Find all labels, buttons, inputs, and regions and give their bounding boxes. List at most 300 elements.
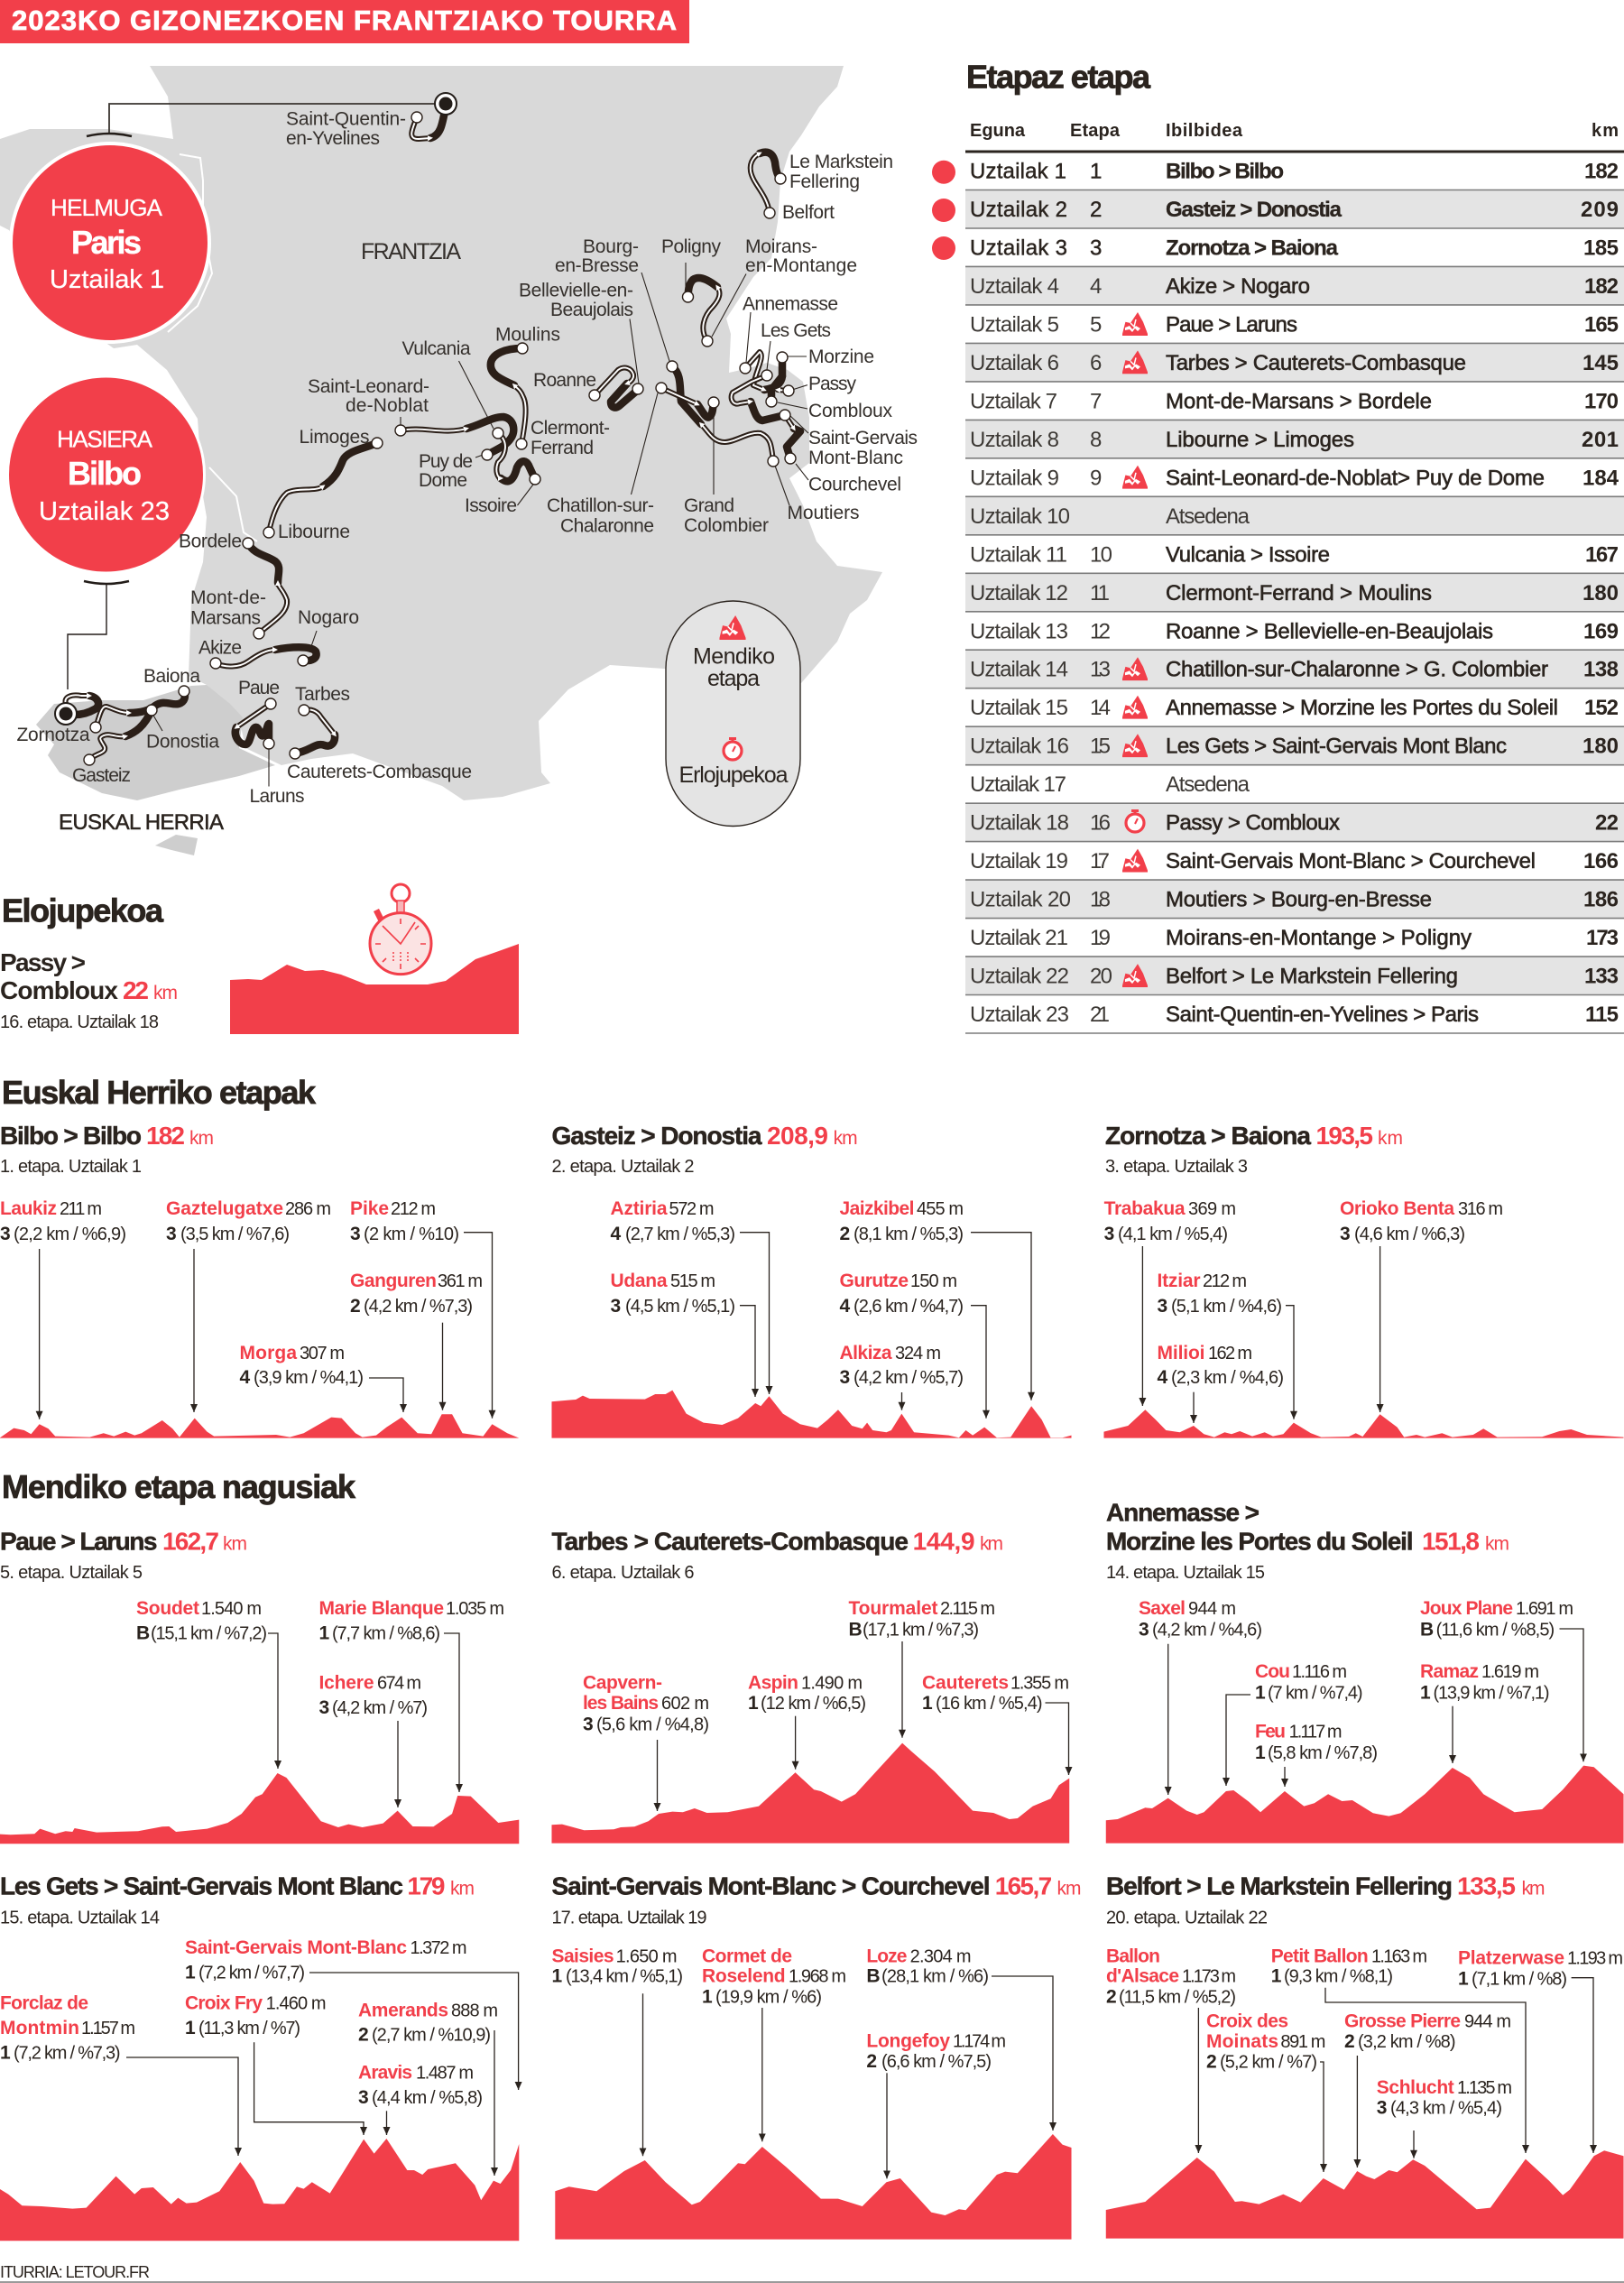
climb: Longefoy: Longefoy bbox=[866, 2030, 950, 2051]
legend: Mendiko bbox=[693, 644, 775, 670]
map labels: Morzine bbox=[808, 347, 874, 367]
climb: Platzerwase bbox=[1458, 1948, 1623, 2153]
climb: Orioko Benta: 3 bbox=[1340, 1224, 1351, 1244]
row: July 17: Uztailak 17 bbox=[970, 772, 1066, 797]
row: July 7: Uztailak 7 bbox=[970, 389, 1057, 413]
panel: Zornotza stage: Zornotza > Baiona bbox=[1105, 1122, 1311, 1150]
row: July 14: 13 bbox=[1090, 658, 1111, 682]
climb: Ichere: 674 m bbox=[377, 1674, 421, 1694]
climb: Gurutze: 150 m bbox=[910, 1271, 957, 1291]
row: July 13: Uztailak 13 bbox=[970, 619, 1068, 643]
climb: Morga: (3,9 km / %4,1) bbox=[254, 1368, 364, 1388]
climb: Aztiria: 572 m bbox=[669, 1199, 715, 1219]
row: July 21: 173 bbox=[1586, 926, 1619, 950]
climb: Aztiria bbox=[610, 1198, 769, 1394]
row: July 2: Uztailak 2 bbox=[970, 198, 1067, 222]
climb: Alkiza: 3 bbox=[839, 1367, 850, 1388]
climb: Itziar bbox=[1157, 1271, 1294, 1419]
panel: Les Gets stage: km bbox=[450, 1878, 475, 1899]
table heading: Etapaz etapa bbox=[966, 58, 1151, 96]
panel: Belfort stage: km bbox=[1521, 1878, 1545, 1899]
route: Vulcania to Issoire bbox=[493, 428, 540, 485]
panel: time trial: Elojupekoa bbox=[2, 892, 164, 929]
map labels: Saint-Leonard- bbox=[308, 376, 429, 397]
panel: Tarbes stage: km bbox=[980, 1534, 1003, 1555]
climb: Marie Blanque bbox=[319, 1598, 504, 1792]
panel: Les Gets stage: Les Gets > Saint-Gervais Mont Blanc bbox=[0, 1872, 403, 1899]
profile: Saint-Gervais bbox=[555, 2134, 1072, 2240]
climb: Grosse Pierre: Grosse Pierre bbox=[1344, 2011, 1461, 2032]
climb: Cauterets: 1 bbox=[922, 1693, 933, 1714]
row: July 20: Moutiers > Bourg-en-Bresse bbox=[1166, 888, 1432, 912]
climb: Petit Ballon: Petit Ballon bbox=[1271, 1946, 1369, 1966]
climb: Grosse Pierre: (3,2 km / %8) bbox=[1358, 2032, 1456, 2052]
route: Saint-Gervais to Courchevel bbox=[780, 410, 800, 464]
Paris finish marker bbox=[435, 93, 457, 115]
climb: Tourmalet: 2.115 m bbox=[940, 1599, 995, 1619]
climb: Ichere: Ichere bbox=[319, 1673, 374, 1694]
row: July 21: 19 bbox=[1090, 926, 1111, 950]
map labels: Donostia bbox=[146, 732, 219, 753]
climb: Jaizkibel: 2 bbox=[839, 1224, 850, 1244]
climb: Ramaz: 1 bbox=[1420, 1683, 1431, 1704]
row: July 7: Mont-de-Marsans > Bordele bbox=[1166, 389, 1432, 413]
climb: Gurutze: (2,6 km / %4,7) bbox=[854, 1297, 964, 1317]
row: July 21 bbox=[970, 926, 1619, 950]
panel: Annemasse stage: Morzine les Portes du Soleil bbox=[1106, 1528, 1413, 1556]
climb: Amerands bbox=[358, 2000, 498, 2176]
climb: Jaizkibel: (8,1 km / %5,3) bbox=[854, 1225, 964, 1244]
climb: Udana: 515 m bbox=[670, 1271, 715, 1291]
climb: Ballon d'Alsace: (11,5 km / %5,2) bbox=[1119, 1987, 1236, 2007]
climb: Morga: Morga bbox=[240, 1343, 297, 1363]
climb: Longefoy bbox=[866, 2030, 1006, 2178]
climb: Aztiria: Aztiria bbox=[610, 1198, 668, 1219]
climb: Laukiz: Laukiz bbox=[0, 1198, 57, 1219]
heading: Basque stages: Euskal Herriko etapak bbox=[2, 1074, 317, 1111]
climb: Tourmalet bbox=[848, 1598, 995, 1738]
map labels: Libourne bbox=[278, 522, 350, 542]
climb: Ichere: (4,2 km / %7) bbox=[332, 1698, 428, 1718]
panel: Belfort stage: Belfort > Le Markstein Fellering bbox=[1106, 1872, 1453, 1899]
climb: Jaizkibel: 455 m bbox=[917, 1199, 964, 1219]
panel: Les Gets stage bbox=[0, 1872, 519, 2241]
row: July 8 bbox=[970, 428, 1619, 452]
climb: Forclaz de Montmin bbox=[0, 1993, 238, 2156]
climb: Morga: 307 m bbox=[300, 1344, 345, 1363]
finish circle: Paris: Paris bbox=[71, 224, 142, 261]
panel: Tarbes stage: 6. etapa. Uztailak 6 bbox=[552, 1563, 695, 1583]
panel: Gasteiz stage: 2. etapa. Uztailak 2 bbox=[552, 1157, 695, 1177]
panel: Belfort stage: 20. etapa. Uztailak 22 bbox=[1106, 1909, 1268, 1928]
climb: Orioko Benta: (4,6 km / %6,3) bbox=[1354, 1225, 1465, 1244]
row: July 4: 4 bbox=[1090, 274, 1102, 299]
panel: Saint-Gervais stage: 17. etapa. Uztailak 19 bbox=[552, 1909, 707, 1928]
map labels: Saint-Gervais bbox=[808, 428, 918, 448]
climb: Gurutze: Gurutze bbox=[839, 1271, 909, 1291]
row: July 1: 1 bbox=[1090, 159, 1102, 184]
climb: Ramaz: 1.619 m bbox=[1481, 1662, 1539, 1682]
start circle: Bilbo: Uztailak 23 bbox=[39, 497, 170, 526]
climb: Aspin: Aspin bbox=[748, 1673, 798, 1694]
panel: time trial: Combloux bbox=[0, 976, 118, 1004]
row: July 8: 8 bbox=[1090, 428, 1102, 452]
column headers: Ibilbidea bbox=[1166, 121, 1243, 141]
row: July 13 bbox=[970, 619, 1619, 643]
row: July 9: Uztailak 9 bbox=[970, 466, 1059, 490]
climb: Milioi: (2,3 km / %4,6) bbox=[1171, 1368, 1284, 1388]
climb: Capvern-les Bains: Capvern- bbox=[583, 1673, 662, 1694]
finish circle: Paris bbox=[11, 143, 209, 342]
route: Moutiers to Bourg-en-Bresse bbox=[667, 361, 779, 467]
climb: Morga: 4 bbox=[240, 1367, 251, 1388]
map labels: Moutiers bbox=[787, 503, 859, 523]
coast details bbox=[122, 79, 257, 541]
climb: Platzerwase: (7,1 km / %8) bbox=[1472, 1969, 1567, 1989]
row: July 4: Akize > Nogaro bbox=[1166, 274, 1310, 299]
row: July 5: Uztailak 5 bbox=[970, 312, 1059, 337]
row: July 20: 186 bbox=[1583, 888, 1619, 912]
climb: Aravis: Aravis bbox=[358, 2062, 412, 2083]
row: July 3 bbox=[970, 236, 1619, 260]
panel: Bilbo stage: Bilbo > Bilbo bbox=[0, 1122, 142, 1150]
route: Akize to Nogaro bbox=[210, 647, 317, 669]
row: July 22 bbox=[970, 964, 1619, 989]
climb: Tourmalet: (17,1 km / %7,3) bbox=[863, 1621, 979, 1641]
climb: Tourmalet: B bbox=[848, 1620, 863, 1641]
climb: Forclaz de Montmin: 1.157 m bbox=[81, 2019, 135, 2038]
map labels: Roanne bbox=[533, 370, 596, 391]
row: July 16: Les Gets > Saint-Gervais Mont Blanc bbox=[1166, 735, 1507, 759]
climb: Pike: Pike bbox=[350, 1198, 389, 1219]
climb: Soudet: (15,1 km / %7,2) bbox=[151, 1624, 267, 1644]
profile: Belfort bbox=[1106, 2150, 1624, 2239]
climb: Grosse Pierre: 2 bbox=[1344, 2031, 1355, 2052]
row: July 12: 11 bbox=[1090, 581, 1110, 605]
row: July 12: Clermont-Ferrand > Moulins bbox=[1166, 581, 1432, 605]
climb: Trabakua: Trabakua bbox=[1104, 1198, 1186, 1219]
climb: Milioi bbox=[1157, 1343, 1284, 1423]
climb: Croix Fry: Croix Fry bbox=[185, 1993, 263, 2014]
row: July 5 bbox=[970, 312, 1619, 337]
climb: Cauterets: Cauterets bbox=[922, 1673, 1009, 1694]
climb: Saint-Gervais Mont-Blanc: 1 bbox=[185, 1963, 196, 1983]
map labels: Gasteiz bbox=[72, 765, 131, 786]
climb: Loze: (28,1 km / %6) bbox=[881, 1967, 989, 1987]
climb: Grosse Pierre: 944 m bbox=[1464, 2012, 1511, 2032]
climb: Cou: 1 bbox=[1255, 1683, 1266, 1704]
row: July 20: 18 bbox=[1090, 888, 1111, 912]
climb: Milioi: 162 m bbox=[1208, 1344, 1252, 1363]
column headers: km bbox=[1592, 121, 1619, 141]
map labels: Mont-Blanc bbox=[808, 448, 903, 468]
climb: Amerands: 888 m bbox=[451, 2001, 498, 2020]
map labels: Zornotza bbox=[16, 725, 90, 745]
row: July 4 bbox=[970, 274, 1619, 299]
climb: Aspin bbox=[748, 1673, 866, 1770]
row: July 3: Uztailak 3 bbox=[970, 236, 1067, 260]
climb: Cormet de Roselend: (19,9 km / %6) bbox=[715, 1987, 822, 2007]
panel: Annemasse stage: Annemasse > bbox=[1106, 1499, 1260, 1527]
climb: Saint-Gervais Mont-Blanc: (7,2 km / %7,7) bbox=[198, 1964, 305, 1983]
climb: Ganguren: 361 m bbox=[438, 1271, 483, 1291]
climb: Platzerwase: 1 bbox=[1458, 1968, 1469, 1989]
climb: Aravis: 1.487 m bbox=[416, 2063, 474, 2083]
map labels: Combloux bbox=[808, 401, 893, 421]
shaded bands bbox=[965, 189, 1624, 994]
map of France with stage routes bbox=[0, 66, 918, 855]
climb: Ballon d'Alsace: 2 bbox=[1106, 1986, 1117, 2007]
climb: Gaztelugatxe: Gaztelugatxe bbox=[166, 1198, 283, 1219]
climb: Ramaz: Ramaz bbox=[1420, 1661, 1479, 1682]
map labels: Mont-de- bbox=[190, 587, 266, 608]
climb: Amerands: 2 bbox=[358, 2025, 369, 2046]
climb: Saxel bbox=[1139, 1598, 1262, 1795]
row: July 13: Roanne > Bellevielle-en-Beaujolais bbox=[1166, 619, 1493, 643]
map labels: Moirans- bbox=[745, 236, 817, 257]
icon: mountain stage bbox=[719, 615, 746, 640]
map labels: en-Bresse bbox=[555, 255, 639, 276]
row: July 15: Uztailak 15 bbox=[970, 696, 1068, 720]
row: July 2: 209 bbox=[1581, 198, 1619, 222]
climb: Cauterets: (16 km / %5,4) bbox=[936, 1694, 1043, 1714]
row: July 4: 182 bbox=[1584, 274, 1619, 299]
row: July 23 bbox=[970, 1003, 1619, 1027]
climb: Alkiza: Alkiza bbox=[839, 1343, 892, 1363]
climb: Orioko Benta: Orioko Benta bbox=[1340, 1198, 1454, 1219]
climb: Orioko Benta bbox=[1340, 1198, 1503, 1412]
panel: Gasteiz stage: 208,9 bbox=[767, 1122, 828, 1150]
row: July 14: Uztailak 14 bbox=[970, 658, 1068, 682]
row: July 6: Tarbes > Cauterets-Combasque bbox=[1166, 351, 1466, 375]
panel: Bilbo stage: 182 bbox=[146, 1122, 185, 1150]
climb: Gurutze: 4 bbox=[839, 1296, 850, 1317]
climb: Pike: 3 bbox=[350, 1224, 361, 1244]
climb: Feu bbox=[1255, 1722, 1378, 1787]
climb: Croix des Moinats: 891 m bbox=[1280, 2032, 1325, 2052]
row: July 7: 170 bbox=[1584, 389, 1619, 413]
route: Belfort to Le Markstein bbox=[751, 153, 786, 218]
climb: Platzerwase: Platzerwase bbox=[1458, 1948, 1564, 1969]
row: July 2: Gasteiz > Donostia bbox=[1166, 198, 1343, 222]
map labels: Belfort bbox=[782, 202, 835, 223]
climb: Forclaz de Montmin: Montmin bbox=[0, 2018, 79, 2038]
row: July 12 bbox=[970, 581, 1619, 605]
climb: Cormet de Roselend bbox=[702, 1946, 846, 2141]
row: July 3: Zornotza > Baiona bbox=[1166, 236, 1339, 260]
panel: Zornotza stage: 193,5 bbox=[1315, 1122, 1373, 1150]
map labels: Limoges bbox=[300, 427, 370, 448]
climb: Ganguren: 2 bbox=[350, 1296, 361, 1317]
row: July 10: Uztailak 10 bbox=[970, 504, 1070, 529]
panel: Paue stage: 5. etapa. Uztailak 5 bbox=[0, 1563, 143, 1583]
climb: Milioi: Milioi bbox=[1157, 1343, 1205, 1363]
climb: Soudet bbox=[136, 1598, 278, 1769]
route: Libourne to Limoges bbox=[263, 438, 383, 538]
climb: Gaztelugatxe: (3,5 km / %7,6) bbox=[180, 1225, 290, 1244]
profile: Passy to Combloux bbox=[230, 944, 519, 1034]
row: July 15: 152 bbox=[1584, 696, 1619, 720]
panel: Bilbo stage: 1. etapa. Uztailak 1 bbox=[0, 1157, 142, 1177]
map leader lines bbox=[152, 263, 808, 787]
map labels bbox=[16, 108, 918, 835]
climb: Aztiria: 4 bbox=[610, 1224, 621, 1244]
climb: Joux Plane: Joux Plane bbox=[1420, 1598, 1513, 1619]
column headers: Eguna bbox=[970, 121, 1026, 141]
icon: stopwatch bbox=[724, 737, 742, 760]
route: Chatillon to Grand Colombier bbox=[656, 383, 719, 418]
climb: Loze bbox=[866, 1946, 1053, 2130]
row: July 1 bbox=[970, 159, 1619, 184]
climb: Udana bbox=[610, 1271, 755, 1397]
map labels: en-Yvelines bbox=[286, 128, 380, 149]
climb: Feu: 1 bbox=[1255, 1742, 1266, 1763]
map labels: de-Noblat bbox=[346, 395, 429, 416]
climb: Saxel: 944 m bbox=[1188, 1599, 1236, 1619]
row: July 15: 14 bbox=[1090, 696, 1111, 720]
climb: Saint-Gervais Mont-Blanc bbox=[185, 1937, 519, 2090]
climb: Aztiria: (2,7 km / %5,3) bbox=[625, 1225, 735, 1244]
column headers bbox=[970, 121, 1619, 141]
climb: Aravis bbox=[358, 2062, 483, 2135]
row: July 11: 167 bbox=[1585, 542, 1619, 567]
row: July 12: 180 bbox=[1582, 581, 1619, 605]
climb: Forclaz de Montmin: (7,2 km / %7,3) bbox=[14, 2044, 121, 2064]
map labels: en-Montange bbox=[745, 255, 857, 276]
climb: Capvern-les Bains: les Bains bbox=[583, 1693, 659, 1714]
row: July 9: Saint-Leonard-de-Noblat> Puy de Dome bbox=[1166, 466, 1545, 490]
panel: Bilbo stage: km bbox=[189, 1128, 214, 1149]
panel: Paue stage: km bbox=[223, 1534, 247, 1555]
row: July 23: Uztailak 23 bbox=[970, 1003, 1069, 1027]
source credit: ITURRIA: LETOUR.FR bbox=[0, 2263, 150, 2281]
climb: Pike: (2 km / %10) bbox=[364, 1225, 459, 1244]
climb: Aspin: 1.490 m bbox=[801, 1674, 863, 1694]
climb: Petit Ballon: (9,3 km / %8,1) bbox=[1284, 1967, 1393, 1987]
row: July 7: 7 bbox=[1090, 389, 1102, 413]
map labels: Beaujolais bbox=[550, 300, 633, 320]
climb: Aspin: (12 km / %6,5) bbox=[761, 1694, 866, 1714]
row: July 16: 15 bbox=[1090, 735, 1111, 759]
route: Bilbo loop with start marker bbox=[55, 695, 98, 725]
row: July 11: Uztailak 11 bbox=[970, 542, 1067, 567]
climb: Capvern-les Bains: (5,6 km / %4,8) bbox=[596, 1715, 709, 1735]
panel: Belfort stage bbox=[1106, 1872, 1624, 2239]
row: July 14: 138 bbox=[1583, 658, 1619, 682]
climb: Croix des Moinats: Croix des bbox=[1206, 2011, 1288, 2032]
row: July 3: 185 bbox=[1583, 236, 1619, 260]
row: July 11: 10 bbox=[1090, 542, 1112, 567]
panel: Les Gets stage: 179 bbox=[407, 1872, 445, 1899]
row: July 8: Uztailak 8 bbox=[970, 428, 1059, 452]
row: July 22: Uztailak 22 bbox=[970, 965, 1069, 989]
legend bbox=[666, 601, 800, 827]
panel: Saint-Gervais stage: Saint-Gervais Mont-Blanc > Courchevel bbox=[552, 1872, 991, 1899]
profile: Les Gets bbox=[0, 2139, 519, 2241]
climb: Alkiza: (4,2 km / %5,7) bbox=[854, 1368, 964, 1388]
panel: Annemasse stage bbox=[1106, 1499, 1624, 1844]
row: July 12: Uztailak 12 bbox=[970, 581, 1068, 605]
map labels: Cauterets-Combasque bbox=[287, 762, 472, 782]
map labels: Bellevielle-en- bbox=[519, 280, 633, 301]
climb: Petit Ballon bbox=[1271, 1946, 1526, 2153]
climb: Ballon d'Alsace: 1.173 m bbox=[1182, 1967, 1236, 1987]
climb: Saisies: 1.650 m bbox=[616, 1946, 678, 1966]
panel: Saint-Gervais stage: km bbox=[1057, 1878, 1081, 1899]
climb: Petit Ballon: 1.163 m bbox=[1371, 1946, 1427, 1966]
climb: Longefoy: 2 bbox=[866, 2051, 877, 2072]
row: July 1: 182 bbox=[1584, 159, 1619, 184]
climb: Croix des Moinats: (5,2 km / %7) bbox=[1220, 2053, 1317, 2073]
row: July 17 bbox=[970, 772, 1250, 797]
climb: Cauterets bbox=[922, 1673, 1069, 1775]
climb: Amerands: (2,7 km / %10,9) bbox=[372, 2026, 491, 2046]
climb: Laukiz: (2,2 km / %6,9) bbox=[14, 1225, 126, 1244]
row: July 7 bbox=[970, 389, 1619, 413]
climb: Marie Blanque: (7,7 km / %8,6) bbox=[332, 1624, 440, 1644]
climb: Croix des Moinats: Moinats bbox=[1206, 2031, 1278, 2052]
row: July 18 bbox=[970, 809, 1619, 836]
route: Clermont-Ferrand to Moulins bbox=[491, 343, 528, 449]
climb: Ramaz bbox=[1420, 1661, 1550, 1763]
climb: Croix Fry: 1.460 m bbox=[266, 1994, 327, 2014]
climb: Alkiza: 324 m bbox=[895, 1344, 941, 1363]
legend: etapa bbox=[707, 666, 760, 691]
climb: Ballon d'Alsace: d'Alsace bbox=[1106, 1966, 1179, 1987]
climb: Schlucht: 3 bbox=[1377, 2097, 1387, 2118]
climb: Cormet de Roselend: 1 bbox=[702, 1986, 713, 2007]
row: July 8: 201 bbox=[1582, 428, 1619, 452]
row: July 18: Uztailak 18 bbox=[970, 811, 1069, 836]
map labels: Grand bbox=[684, 495, 734, 516]
climb: Cauterets: 1.355 m bbox=[1010, 1674, 1069, 1694]
finish circle: Paris: Uztailak 1 bbox=[50, 265, 164, 294]
map labels: Vulcania bbox=[402, 338, 471, 359]
map labels: Paue bbox=[238, 678, 280, 698]
row: July 19: Uztailak 19 bbox=[970, 849, 1068, 873]
panel: Annemasse stage: 151,8 bbox=[1422, 1528, 1480, 1556]
row: July 21: Uztailak 21 bbox=[970, 926, 1068, 950]
map labels: Le Markstein bbox=[789, 152, 893, 172]
start circle: Bilbo bbox=[7, 376, 204, 573]
climb: Schlucht: Schlucht bbox=[1377, 2077, 1454, 2098]
climb: Aspin: 1 bbox=[748, 1693, 759, 1714]
route: Roanne to Belleville bbox=[589, 368, 643, 408]
climb: Saxel: (4,2 km / %4,6) bbox=[1152, 1621, 1262, 1641]
climb: Croix Fry: (11,3 km / %7) bbox=[198, 2019, 300, 2038]
climb: Cou: Cou bbox=[1255, 1661, 1290, 1682]
map labels: Moulins bbox=[495, 325, 560, 345]
route: Passy to Combloux bbox=[766, 376, 794, 407]
climb: Saxel: 3 bbox=[1139, 1620, 1149, 1641]
route: Tarbes to Cauterets bbox=[290, 705, 335, 759]
map labels: Les Gets bbox=[761, 320, 831, 341]
row: July 19 bbox=[970, 849, 1619, 873]
map labels: Chatillon-sur- bbox=[547, 495, 654, 516]
icon: large stopwatch bbox=[370, 884, 431, 975]
map labels: Annemasse bbox=[743, 294, 838, 314]
climb: Marie Blanque: 1 bbox=[319, 1623, 330, 1644]
route: Gasteiz to Donostia bbox=[84, 710, 152, 765]
route: Saint-Leonard to Puy de Dome bbox=[395, 417, 513, 460]
panel: time trial bbox=[0, 884, 519, 1034]
route: Annemasse to Morzine bbox=[740, 352, 788, 390]
climb: Schlucht bbox=[1377, 2077, 1512, 2158]
route: Paue to Laruns bbox=[235, 698, 276, 749]
row: July 17: Atsedena bbox=[1166, 772, 1250, 797]
panel: Zornotza stage: 3. etapa. Uztailak 3 bbox=[1105, 1157, 1248, 1177]
row: July 18: Passy > Combloux bbox=[1166, 811, 1340, 836]
